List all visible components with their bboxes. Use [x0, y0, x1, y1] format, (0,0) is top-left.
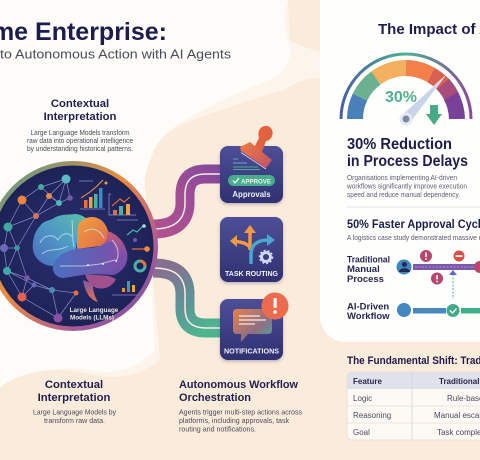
text block: contextual interpretation bottom: Contextual: [45, 379, 103, 391]
text block: contextual interpretation top: by understanding historical patterns.: [27, 144, 133, 153]
label: AI-driven workflow: [347, 302, 390, 322]
label: traditional process: Process: [347, 274, 384, 285]
label: task routing: TASK ROUTING: [225, 269, 278, 278]
background: light upper-left shape: [0, 0, 290, 387]
flow: AI-driven: [397, 303, 480, 317]
text block: autonomous workflow: Orchestration: [179, 392, 251, 404]
icon: stamp: [240, 126, 273, 169]
table: [347, 372, 480, 440]
text block: autonomous workflow: Autonomous Workflow: [179, 379, 298, 391]
panel: impact: [320, 0, 480, 342]
table: Traditional: [439, 377, 479, 386]
icon: chat bubble: [233, 309, 272, 342]
card: approvals: [220, 126, 283, 203]
stat heading: [347, 136, 468, 170]
text block: contextual interpretation bottom: transform raw data.: [44, 416, 105, 425]
label: AI-driven workflow: AI-Driven: [347, 302, 389, 312]
background: pale band: [0, 0, 322, 387]
left lobe: [33, 214, 88, 266]
label: traditional process: Traditional: [347, 254, 390, 266]
stat description: [346, 173, 467, 199]
text block: contextual interpretation bottom: [33, 379, 116, 425]
text block: contextual interpretation bottom: Interpretation: [38, 392, 110, 404]
text block: contextual interpretation bottom: Large Language Models by: [33, 408, 116, 416]
table: Logic: [353, 394, 372, 403]
pipe: bottom connector: [153, 268, 224, 328]
label: approvals: Approvals: [232, 190, 271, 199]
cerebellum: [85, 274, 116, 289]
label: notifications: NOTIFICATIONS: [224, 348, 279, 356]
label: traditional process: Manual: [347, 264, 380, 275]
right rear lobe: [92, 231, 127, 275]
pipe: top connector: [153, 174, 224, 229]
text block: autonomous workflow: [179, 379, 302, 434]
icon: routing arrows: [230, 225, 275, 264]
approve pill: APPROVE: [241, 178, 271, 186]
icon: alert badge: [262, 292, 288, 320]
label: LLMs: Models (LLMs): [70, 314, 114, 322]
brain folds: [40, 220, 118, 266]
table: Goal: [353, 428, 370, 437]
stat description: workflows significantly improve execution: [346, 182, 467, 190]
text block: autonomous workflow: Agents trigger multi-step actions across: [179, 408, 302, 416]
text block: contextual interpretation top: Large Language Models transform: [30, 128, 130, 137]
flow: traditional: [396, 250, 480, 284]
text lines: [233, 159, 260, 170]
text block: contextual interpretation top: raw data into operational intelligence: [27, 136, 133, 145]
table: Feature: [353, 377, 382, 386]
text block: contextual interpretation top: Contextual: [51, 98, 109, 110]
stat description: Organisations implementing AI-driven: [347, 173, 457, 182]
icon: down arrow: [426, 105, 442, 125]
text block: contextual interpretation top: [27, 98, 133, 153]
text block: contextual interpretation top: Interpretation: [44, 111, 116, 123]
needle: [400, 76, 445, 126]
subtitle: to Autonomous Action with AI Agents: [0, 46, 232, 62]
stat heading: 30% Reduction: [347, 136, 452, 153]
circle: LLM brain illustration: [0, 161, 158, 331]
label: LLMs: Large Language: [70, 307, 119, 314]
brain: [33, 214, 127, 302]
brain stem: [83, 280, 98, 302]
gauge chart: [341, 54, 471, 126]
card: task routing: [220, 217, 283, 282]
temporal lobe: [53, 242, 118, 278]
network graph: [0, 174, 78, 322]
label: LLMs: [70, 307, 119, 322]
stat heading: in Process Delays: [347, 153, 468, 170]
text block: autonomous workflow: routing and notifications.: [179, 424, 256, 434]
label: AI-driven workflow: Workflow: [347, 311, 390, 322]
gauge value: 30%: [385, 89, 417, 106]
stat description: speed and reduce manual dependency.: [347, 190, 460, 199]
right frontal lobe: [77, 217, 109, 249]
text block: autonomous workflow: platforms, including approvals, task: [179, 416, 289, 425]
arrow: comparison: [449, 270, 457, 299]
table: Reasoning: [353, 411, 391, 420]
card: notifications: [220, 292, 288, 360]
bar charts: [79, 180, 150, 295]
label: traditional process: [347, 254, 390, 285]
